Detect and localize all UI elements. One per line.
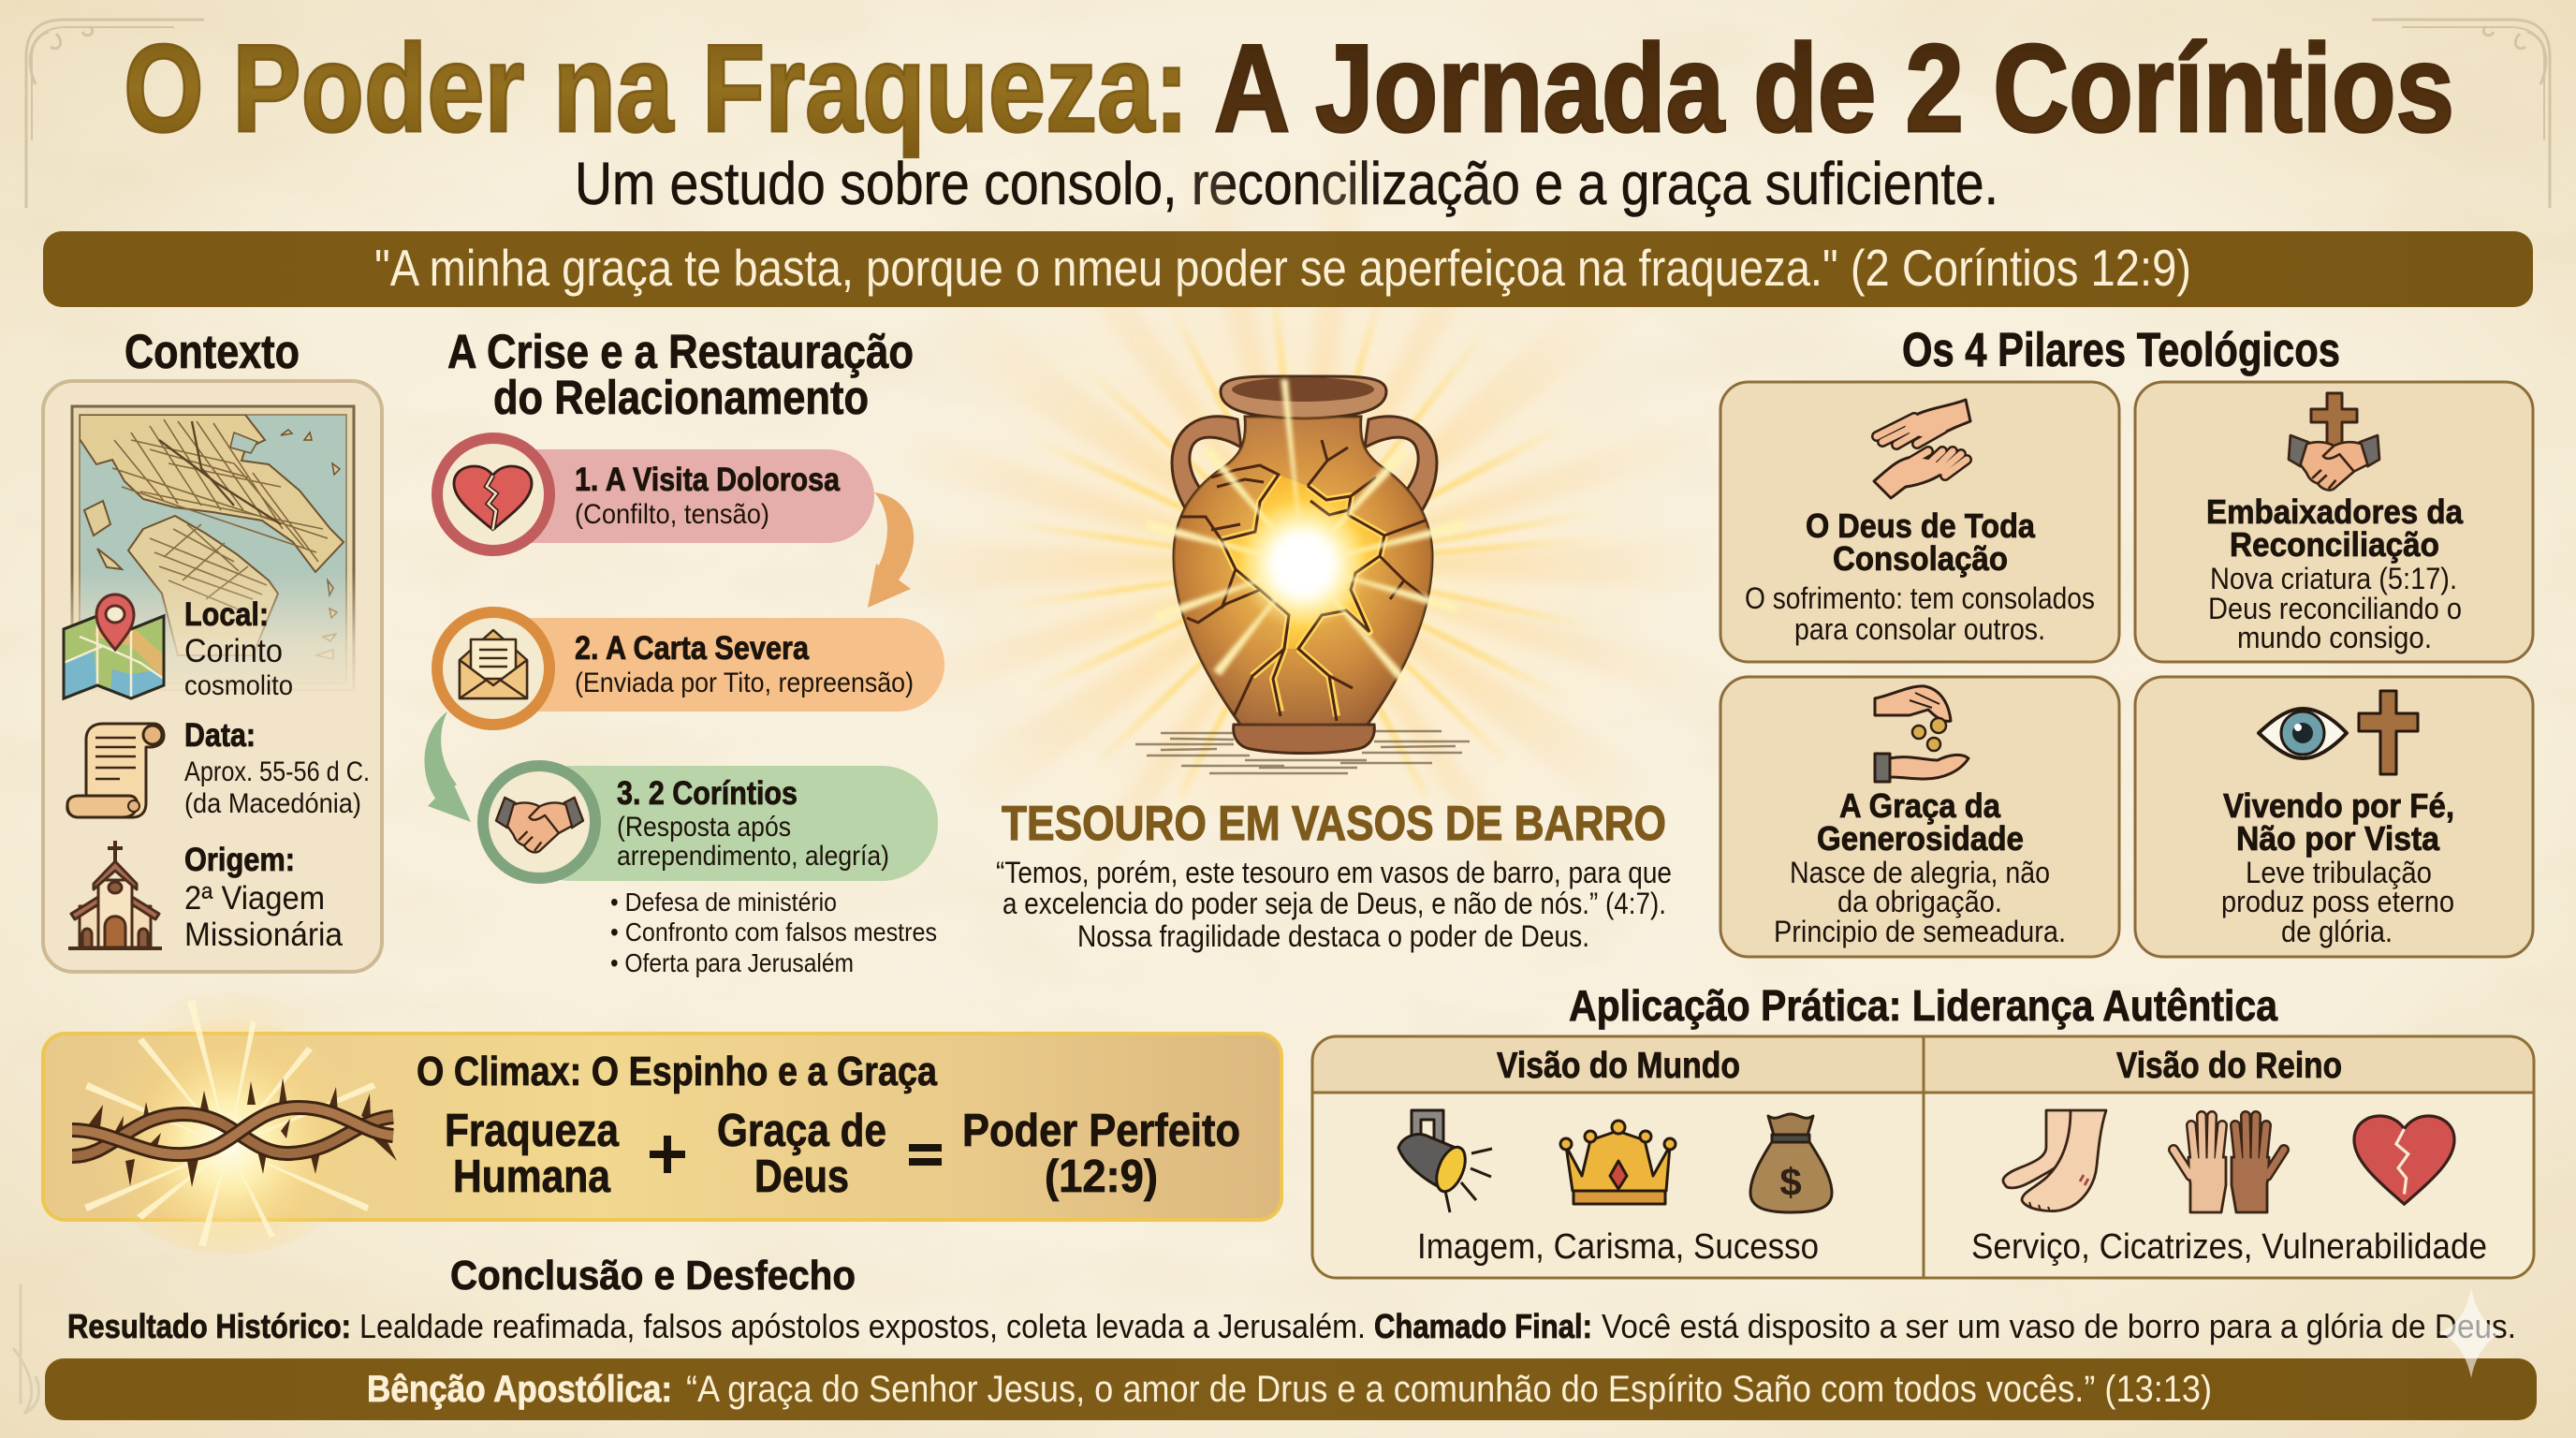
- jar quote text: “Temos, porém, este tesouro em vasos de barro, para que: [996, 856, 1672, 889]
- step 1: a visita dolorosa: 1. A Visita Dolorosa: [575, 462, 840, 498]
- icon: comforting hands: [1874, 400, 1970, 498]
- icon: church: [68, 841, 162, 948]
- step 3: 2 coríntios: 3. 2 Coríntios: [617, 775, 798, 812]
- jar rim: [1221, 376, 1386, 418]
- card text: Consolação: [1833, 539, 2008, 578]
- jar light opening and cracks: [1174, 417, 1432, 726]
- card text: Principio de semeadura.: [1774, 915, 2066, 948]
- step 2: a carta severa: 2. A Carta Severa: [575, 630, 809, 667]
- icon: money bag: [1750, 1114, 1832, 1212]
- step 2: a carta severa: (Enviada por Tito, repreensão): [575, 668, 914, 698]
- column: visão do mundo: [1398, 1046, 1832, 1267]
- heading: aplicação prática: Aplicação Prática: Liderança Autêntica: [1569, 981, 2277, 1030]
- arrow: step 2 to step 3: [425, 712, 471, 822]
- equation: fraqueza humana: [445, 1106, 620, 1202]
- equation: poder perfeito: Poder Perfeito: [962, 1106, 1240, 1156]
- origem text: 2ª Viagem: [184, 880, 325, 917]
- column: visão do reino: [1971, 1046, 2487, 1267]
- ground shadow: [1135, 731, 1470, 773]
- card: a graça da generosidade: [1720, 677, 2119, 957]
- heading: a crise e a restauração: A Crise e a Restauração: [447, 325, 914, 378]
- glow above climax panel: [107, 992, 350, 1198]
- banner: bênção apostólica: [45, 1358, 2537, 1420]
- card: o deus de toda consolação: [1720, 382, 2119, 662]
- card text: O Deus de Toda: [1806, 506, 2036, 545]
- icon: crown: [1560, 1121, 1676, 1204]
- equation: graça de deus: Graça de: [717, 1106, 886, 1156]
- step 3: 2 coríntios: arrependimento, alegría): [617, 841, 889, 872]
- jar foot: [1234, 725, 1374, 753]
- banner: bênção apostólica: Bênção Apostólica:: [367, 1369, 672, 1410]
- subtitle: Um estudo sobre consolo, reconcilização e a graça suficiente.: [575, 150, 1998, 217]
- step 3 bullet list: [610, 888, 937, 977]
- heading: os 4 pilares: Os 4 Pilares Teológicos: [1902, 323, 2340, 376]
- equation: fraqueza humana: Humana: [453, 1152, 611, 1202]
- origem text: Origem:: [184, 842, 295, 878]
- sparkle watermark: [2438, 1287, 2504, 1378]
- data text: Aprox. 55-56 d C.: [184, 756, 370, 787]
- local text: cosmolito: [184, 670, 293, 701]
- icon: eye and cross: [2259, 691, 2418, 774]
- ornament: bottom-left corner: [13, 1284, 39, 1414]
- jar quote text: a excelencia do poder seja de Deus, e não de nós.” (4:7).: [1003, 887, 1666, 920]
- icon: broken heart: [2354, 1116, 2454, 1204]
- panel: o climax: O Climax: O Espinho e a Graça: [417, 1049, 937, 1094]
- card text: para consolar outros.: [1794, 612, 2045, 646]
- data text: (da Macedónia): [184, 788, 361, 819]
- ornament: top-left corner: [26, 20, 204, 208]
- icon: crown of thorns: [72, 1078, 397, 1187]
- step 3 bullet list: • Oferta para Jerusalém: [610, 948, 854, 977]
- arrow: step 1 to step 2: [868, 492, 914, 608]
- card text: Leve tribulação: [2246, 856, 2432, 889]
- heading: contexto: Contexto: [124, 325, 300, 378]
- jar quote text: [996, 856, 1672, 953]
- equation: equals: [909, 1148, 942, 1162]
- equation: plus: [650, 1136, 685, 1173]
- step 1: a visita dolorosa: (Confilto, tensão): [575, 499, 769, 530]
- icon: handshake: [496, 798, 583, 852]
- data text: Data:: [184, 717, 256, 754]
- data text: [184, 717, 370, 819]
- card text: de glória.: [2281, 915, 2393, 948]
- local text: Corinto: [184, 633, 283, 669]
- step 3: 2 coríntios: (Resposta após: [617, 812, 791, 843]
- equation: poder perfeito: [962, 1106, 1240, 1202]
- conclusion line: Lealdade reafimada, falsos apóstolos expostos, coleta levada a Jerusalém.: [359, 1307, 1366, 1345]
- jar quote text: Nossa fragilidade destaca o poder de Deus.: [1077, 919, 1589, 953]
- icon: hands and coins: [1875, 686, 1969, 782]
- heading: tesouro em vasos de barro: TESOURO EM VASOS DE BARRO: [1002, 797, 1666, 851]
- card: vivendo por fé: [2135, 677, 2533, 957]
- origem text: Missionária: [184, 917, 344, 953]
- icon: money bag: $: [1779, 1160, 1802, 1204]
- step 1: a visita dolorosa: [437, 438, 874, 550]
- heading: conclusão e desfecho: Conclusão e Desfecho: [450, 1253, 856, 1299]
- card text: Reconciliação: [2230, 525, 2439, 564]
- conclusion line: Resultado Histórico:: [67, 1307, 351, 1345]
- equation: fraqueza humana: Fraqueza: [445, 1106, 620, 1156]
- ornament: top-right corner: [2372, 20, 2550, 208]
- title: [124, 20, 2454, 158]
- card text: [2221, 786, 2454, 948]
- card text: [2206, 492, 2464, 654]
- conclusion line: [67, 1307, 2516, 1345]
- narrow golden spikes: [997, 293, 1611, 799]
- banner: key verse: "A minha graça te basta, porque o nmeu poder se aperfeiçoa na fraqueza." (2 Coríntios 12:9): [374, 239, 2191, 297]
- icon: scroll: [67, 724, 164, 817]
- step 2: a carta severa: [437, 612, 944, 725]
- banner: key verse: [43, 231, 2533, 307]
- step 3 bullet list: • Defesa de ministério: [610, 888, 837, 917]
- conclusion line: Chamado Final:: [1374, 1307, 1592, 1345]
- column: visão do mundo: Visão do Mundo: [1497, 1046, 1740, 1086]
- light burst behind crown: [84, 1000, 376, 1255]
- panel: contexto: [43, 381, 382, 972]
- local text: Local:: [184, 596, 269, 633]
- column: visão do reino: Serviço, Cicatrizes, Vulnerabilidade: [1971, 1227, 2487, 1267]
- card text: Generosidade: [1817, 819, 2024, 858]
- card text: mundo consigo.: [2237, 621, 2432, 654]
- banner: bênção apostólica: “A graça do Senhor Jesus, o amor de Drus e a comunhão do Espírito Saño com todos vocês.” (13:13): [686, 1369, 2212, 1410]
- heading: a crise e a restauração: [447, 325, 914, 424]
- step 3 bullet list: • Confronto com falsos mestres: [610, 917, 937, 946]
- title: O Poder na Fraqueza:: [124, 20, 1189, 158]
- card text: da obrigação.: [1837, 885, 2002, 918]
- card text: A Graça da: [1839, 786, 2001, 825]
- icon: cross and handshake: [2289, 393, 2379, 491]
- icon: envelope: [460, 630, 527, 698]
- foreground sparkle rays: [1147, 379, 1465, 683]
- icon: broken heart: [454, 466, 532, 530]
- card text: produz poss eterno: [2221, 885, 2454, 918]
- light rays: [863, 125, 1743, 937]
- conclusion line: Você está disposito a ser um vaso de borro para a glória de Deus.: [1602, 1307, 2516, 1345]
- step 3: 2 coríntios: [483, 766, 938, 881]
- card text: Deus reconciliando o: [2208, 592, 2462, 625]
- card text: Não por Vista: [2236, 819, 2440, 858]
- card text: O sofrimento: tem consolados: [1745, 581, 2095, 615]
- card text: Nasce de alegria, não: [1790, 856, 2050, 889]
- central illustration: glowing cracked clay jar: [932, 160, 1679, 869]
- jar body: [1174, 417, 1432, 726]
- comparison table: liderança autêntica: [1312, 1036, 2534, 1278]
- card text: Nova criatura (5:17).: [2210, 562, 2457, 595]
- local text: [184, 596, 293, 701]
- icon: spotlight: [1398, 1110, 1492, 1212]
- heading: a crise e a restauração: do Relacionamento: [493, 371, 869, 424]
- antique map: [70, 406, 356, 693]
- card text: [1745, 506, 2095, 646]
- column: visão do mundo: Imagem, Carisma, Sucesso: [1417, 1227, 1819, 1267]
- card text: Embaixadores da: [2206, 492, 2464, 531]
- column: visão do reino: Visão do Reino: [2116, 1046, 2342, 1086]
- icon: map with pin: [64, 594, 164, 698]
- equation: poder perfeito: (12:9): [1045, 1152, 1158, 1202]
- equation: graça de deus: Deus: [754, 1152, 849, 1202]
- icon: open scarred hands: [2174, 1116, 2284, 1212]
- panel: o climax: [43, 1000, 1281, 1255]
- handles: [1172, 417, 1241, 521]
- icon: feet: [2003, 1110, 2106, 1211]
- origem text: [184, 842, 344, 953]
- equation: graça de deus: [717, 1106, 886, 1202]
- card text: [1774, 786, 2066, 948]
- card: embaixadores da reconciliação: [2135, 382, 2533, 662]
- card text: Vivendo por Fé,: [2223, 786, 2454, 825]
